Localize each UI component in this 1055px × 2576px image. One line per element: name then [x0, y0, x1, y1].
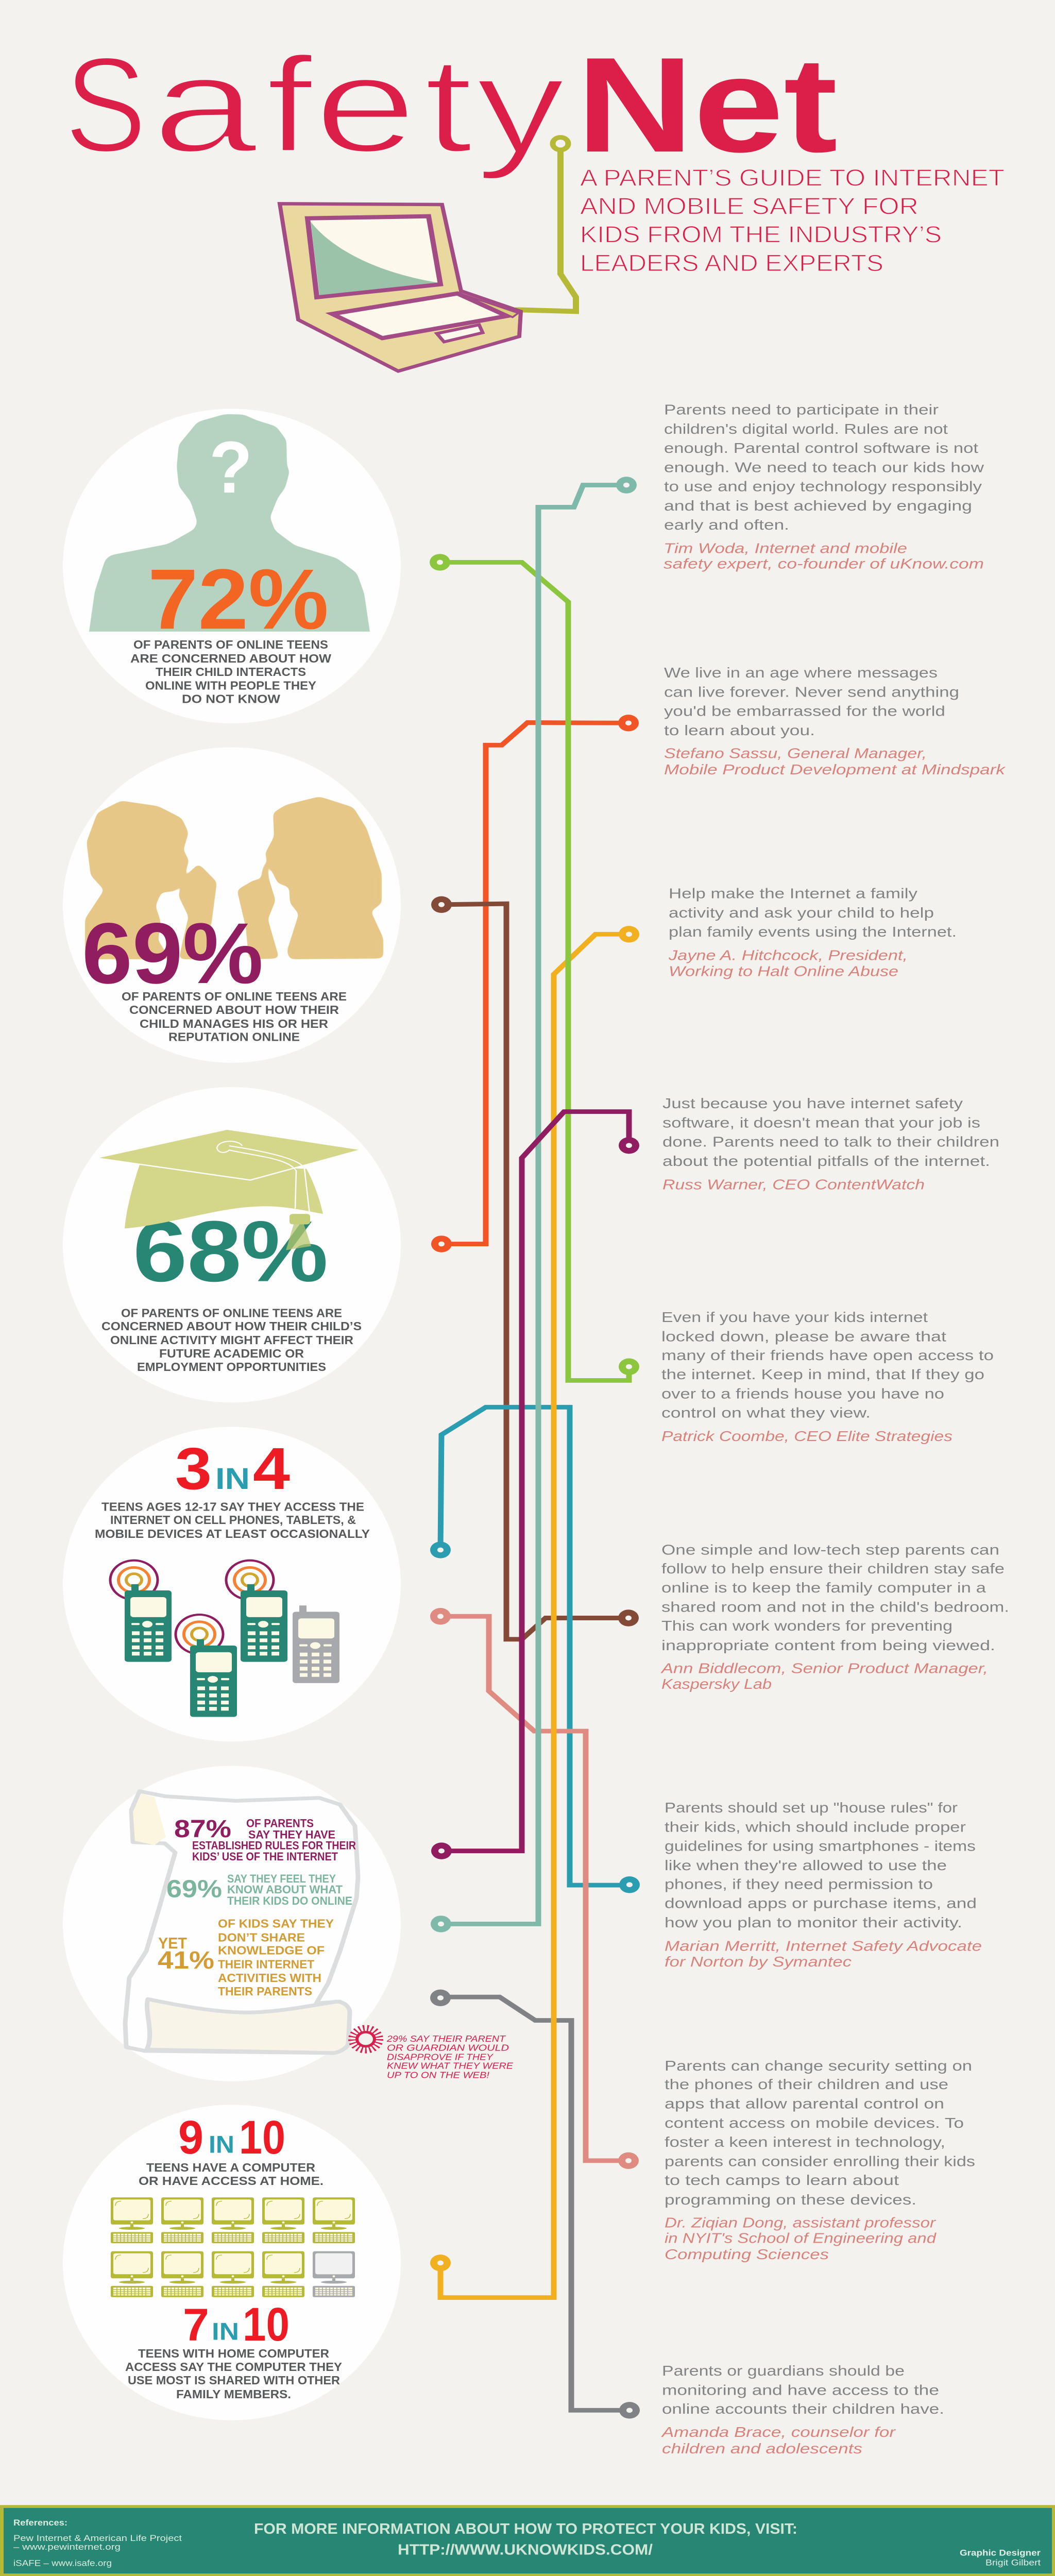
- quote: Patrick Coombe: Patrick Coombe, CEO Elite Strategies: [661, 1428, 952, 1444]
- quote: Marian Merritt: [665, 1800, 982, 1970]
- icon: two silhouettes whispering: [85, 796, 383, 959]
- subtitle: KIDS FROM THE INDUSTRY’S: [580, 222, 942, 248]
- panel: scroll statistics: [63, 1766, 401, 2081]
- quote: Stefano Sassu: can live forever. Never send anything: [664, 684, 959, 700]
- references: Pew Internet & American Life Project: [13, 2534, 182, 2543]
- stat: 87 percent: [174, 1815, 356, 1863]
- quote: Tim Woda: and that is best achieved by engaging: [664, 498, 972, 514]
- stat: 87 percent: ESTABLISHED RULES FOR THEIR: [192, 1840, 356, 1852]
- quote: Tim Woda: early and often.: [664, 517, 789, 533]
- quote: Stefano Sassu: you'd be embarrassed for the world: [664, 703, 945, 719]
- caption: ONLINE ACTIVITY MIGHT AFFECT THEIR: [110, 1334, 353, 1347]
- icon: laptop: [280, 204, 521, 371]
- line: yellow: [430, 926, 639, 2298]
- references: References:: [13, 2518, 67, 2528]
- title: a: [152, 29, 259, 180]
- caption: shared computers: USE MOST IS SHARED WITH OTHER: [128, 2375, 340, 2387]
- figure: 3 in 4: IN: [215, 1462, 250, 1496]
- stat: 87 percent: KIDS’ USE OF THE INTERNET: [192, 1851, 338, 1863]
- stat: yet 41 percent: THEIR PARENTS: [218, 1985, 312, 1998]
- caption: OF PARENTS OF ONLINE TEENS ARE: [121, 1307, 342, 1320]
- caption: CHILD MANAGES HIS OR HER: [140, 1018, 328, 1030]
- figure: 7 in 10: 10: [243, 2298, 290, 2351]
- callout: 29 percent: OR GUARDIAN WOULD: [387, 2043, 509, 2053]
- quote: Tim Woda: Parents need to participate in their: [664, 402, 939, 418]
- caption: computer access: OR HAVE ACCESS AT HOME.: [139, 2175, 324, 2188]
- quote: Amanda Brace: Parents or guardians should be: [662, 2363, 905, 2379]
- quote: Ann Biddlecom: follow to help ensure their children stay safe: [661, 1561, 1005, 1577]
- laptop keyboard: [332, 294, 507, 338]
- quote: Russ Warner: software, it doesn't mean that your job is: [662, 1115, 980, 1131]
- stat: yet 41 percent: DON’T SHARE: [218, 1930, 305, 1944]
- line: blue: [430, 1407, 640, 1893]
- panel: stat 68 percent: [63, 1087, 401, 1402]
- callout: 29 percent: 29% SAY THEIR PARENT: [386, 2034, 506, 2044]
- quote: Tim Woda: safety expert, co-founder of uKnow.com: [663, 556, 984, 572]
- icon: computers grid: [111, 2197, 355, 2297]
- quote: Jayne A. Hitchcock: Help make the Internet a family: [669, 886, 918, 902]
- line: brown: [431, 896, 639, 1639]
- figure: 7 in 10: [183, 2298, 290, 2351]
- caption: CONCERNED ABOUT HOW THEIR CHILD’S: [101, 1320, 362, 1333]
- caption: OF PARENTS OF ONLINE TEENS ARE: [122, 991, 347, 1003]
- quote: Russ Warner: about the potential pitfalls of the internet.: [662, 1153, 990, 1169]
- caption: INTERNET ON CELL PHONES, TABLETS, &: [110, 1514, 356, 1527]
- stat: 87 percent: OF PARENTS: [246, 1818, 314, 1830]
- figure: 9 in 10: 10: [239, 2111, 285, 2164]
- icon: paper scroll: [125, 1791, 358, 2053]
- quote: Stefano Sassu: We live in an age where messages: [664, 665, 938, 681]
- title: S: [64, 29, 147, 180]
- title: e: [314, 29, 417, 180]
- title: t: [424, 29, 473, 180]
- caption: shared computers: [125, 2348, 342, 2401]
- caption: REPUTATION ONLINE: [168, 1031, 300, 1044]
- figure: 68%: 68%: [133, 1202, 328, 1299]
- subtitle: LEADERS AND EXPERTS: [580, 250, 883, 276]
- figure: 9 in 10: IN: [209, 2131, 234, 2158]
- panel: stat 69 percent: [63, 747, 401, 1063]
- icon: graduation cap: [96, 1129, 362, 1250]
- caption: EMPLOYMENT OPPORTUNITIES: [137, 1361, 326, 1374]
- call to action: FOR MORE INFORMATION ABOUT HOW TO PROTECT YOUR KIDS, VISIT:: [254, 2520, 797, 2537]
- figure: 3 in 4: 4: [253, 1436, 290, 1502]
- figure: 7 in 10: 7: [183, 2299, 209, 2351]
- stat: yet 41 percent: KNOWLEDGE OF: [218, 1943, 325, 1957]
- quote: Marian Merritt: their kids, which should include proper: [665, 1819, 966, 1835]
- quote: Patrick Coombe: [661, 1309, 994, 1444]
- stat: yet 41 percent: OF KIDS SAY THEY: [218, 1917, 334, 1930]
- stat: 69 percent: SAY THEY FEEL THEY: [227, 1873, 336, 1886]
- caption: computer access: [139, 2161, 324, 2188]
- footer: [0, 2505, 1055, 2576]
- quote: Patrick Coombe: many of their friends have open access to: [661, 1347, 994, 1363]
- references: – www.pewinternet.org: [13, 2543, 121, 2552]
- quote: Amanda Brace: monitoring and have access to the: [662, 2382, 939, 2398]
- title: [64, 29, 838, 181]
- icon: sunburst: [352, 2028, 379, 2050]
- designer credit: Graphic Designer: [960, 2548, 1041, 2558]
- quote: Jayne A. Hitchcock: activity and ask your child to help: [669, 905, 934, 921]
- caption: [101, 1307, 362, 1374]
- caption: shared computers: ACCESS SAY THE COMPUTER THEY: [125, 2361, 342, 2374]
- quote: Amanda Brace: online accounts their children have.: [662, 2401, 944, 2417]
- figure: 69%: 69%: [82, 905, 263, 1002]
- subtitle: [580, 165, 1005, 276]
- quote: Tim Woda: [663, 402, 984, 572]
- callout: 29 percent: UP TO ON THE WEB!: [387, 2070, 489, 2080]
- references: iSAFE – www.isafe.org: [13, 2558, 112, 2568]
- references: [13, 2518, 182, 2568]
- stat: 69 percent: THEIR KIDS DO ONLINE: [227, 1895, 352, 1907]
- callout: 29 percent: [386, 2034, 514, 2080]
- quote: Stefano Sassu: [664, 665, 1006, 777]
- quote: Dr. Ziqian Dong: content access on mobile devices. To: [665, 2115, 964, 2131]
- callout: 29 percent: DISAPPROVE IF THEY: [387, 2052, 494, 2062]
- designer credit: [960, 2548, 1041, 2568]
- title: y: [476, 29, 565, 181]
- quote: Patrick Coombe: control on what they view.: [661, 1405, 871, 1421]
- quote: Marian Merritt: Marian Merritt, Internet Safety Advocate: [665, 1938, 982, 1954]
- icon: silhouette with question mark: ?: [209, 426, 252, 508]
- quote: Stefano Sassu: Mobile Product Development at Mindspark: [664, 761, 1006, 777]
- figure: 9 in 10: [178, 2111, 285, 2164]
- caption: shared computers: FAMILY MEMBERS.: [176, 2388, 291, 2401]
- quote: Patrick Coombe: the internet. Keep in mind, that If they go: [661, 1366, 984, 1382]
- quote: Ann Biddlecom: online is to keep the family computer in a: [661, 1580, 986, 1596]
- quote: Ann Biddlecom: [660, 1541, 1009, 1692]
- quote: Russ Warner: Russ Warner, CEO ContentWatch: [662, 1176, 925, 1193]
- quote: Patrick Coombe: over to a friends house you have no: [661, 1385, 944, 1402]
- stat: 87 percent: 87%: [174, 1815, 231, 1843]
- caption: ONLINE WITH PEOPLE THEY: [145, 680, 316, 692]
- quote: Marian Merritt: phones, if they need permission to: [665, 1876, 933, 1892]
- stat: 69 percent: 69%: [166, 1875, 222, 1903]
- caption: OF PARENTS OF ONLINE TEENS: [133, 639, 328, 651]
- quote: Jayne A. Hitchcock: Jayne A. Hitchcock, President,: [668, 947, 908, 963]
- laptop screen: [308, 216, 440, 297]
- figure: 3 in 4: 3: [175, 1436, 212, 1502]
- caption: ARE CONCERNED ABOUT HOW: [130, 652, 332, 665]
- quote: Patrick Coombe: locked down, please be aware that: [661, 1328, 946, 1345]
- call to action: [254, 2520, 797, 2558]
- line: pink: [430, 1608, 639, 2169]
- panel: 3 in 4 teens: [63, 1427, 401, 1741]
- caption: [95, 1501, 370, 1540]
- caption: MOBILE DEVICES AT LEAST OCCASIONALLY: [95, 1528, 370, 1540]
- line: green: [430, 554, 639, 1380]
- quote: Jayne A. Hitchcock: plan family events using the Internet.: [669, 924, 957, 940]
- stat: 87 percent: SAY THEY HAVE: [248, 1829, 335, 1841]
- quote: Dr. Ziqian Dong: in NYIT's School of Engineering and: [665, 2230, 937, 2246]
- quote: Dr. Ziqian Dong: [665, 2058, 975, 2262]
- panel: stat 72 percent: [63, 409, 401, 723]
- quote: Marian Merritt: how you plan to monitor their activity.: [665, 1914, 962, 1930]
- quote: Marian Merritt: like when they're allowed to use the: [665, 1857, 947, 1873]
- caption: THEIR CHILD INTERACTS: [156, 666, 306, 679]
- stat: 69 percent: KNOW ABOUT WHAT: [227, 1884, 343, 1896]
- title: Net: [576, 29, 838, 180]
- quote: Dr. Ziqian Dong: Parents can change security setting on: [665, 2058, 972, 2074]
- quote: Tim Woda: Tim Woda, Internet and mobile: [663, 540, 907, 556]
- quote: Dr. Ziqian Dong: Computing Sciences: [665, 2246, 829, 2262]
- laptop hinge: [457, 293, 518, 317]
- quote: Dr. Ziqian Dong: foster a keen interest in technology,: [665, 2134, 945, 2150]
- caption: [130, 639, 332, 706]
- subtitle: AND MOBILE SAFETY FOR: [580, 193, 918, 219]
- subtitle: A PARENT’S GUIDE TO INTERNET: [580, 165, 1005, 191]
- caption: CONCERNED ABOUT HOW THEIR: [129, 1004, 339, 1016]
- stat: yet 41 percent: 41%: [158, 1946, 214, 1974]
- caption: shared computers: TEENS WITH HOME COMPUTER: [138, 2348, 329, 2361]
- caption: FUTURE ACADEMIC OR: [159, 1347, 304, 1360]
- connector from title to laptop: [515, 138, 576, 311]
- quote: Amanda Brace: children and adolescents: [662, 2441, 862, 2456]
- quote: Marian Merritt: for Norton by Symantec: [665, 1954, 852, 1970]
- network lines connecting stats and quotes: [430, 477, 640, 2419]
- quote: Tim Woda: enough. We need to teach our kids how: [664, 459, 984, 476]
- quote: Patrick Coombe: Even if you have your kids internet: [661, 1309, 928, 1325]
- quote: Ann Biddlecom: Kaspersky Lab: [661, 1676, 772, 1692]
- quote: Russ Warner: Just because you have internet safety: [662, 1095, 963, 1111]
- quote: Jayne A. Hitchcock: [668, 886, 957, 979]
- quote: Tim Woda: enough. Parental control software is not: [664, 440, 978, 456]
- caption: [122, 991, 347, 1044]
- title: f: [266, 29, 313, 180]
- quote: Amanda Brace: Amanda Brace, counselor for: [661, 2424, 896, 2440]
- quote: Jayne A. Hitchcock: Working to Halt Online Abuse: [669, 963, 898, 979]
- panel: home computers: [63, 2105, 401, 2420]
- quote: Dr. Ziqian Dong: to tech camps to learn about: [665, 2172, 899, 2188]
- designer credit: Brigit Gilbert: [985, 2558, 1041, 2568]
- quote: Ann Biddlecom: This can work wonders for preventing: [661, 1618, 952, 1634]
- quote: Dr. Ziqian Dong: apps that allow parental control on: [665, 2096, 944, 2112]
- line: sage: [431, 477, 637, 1933]
- figure: 7 in 10: IN: [212, 2318, 239, 2345]
- stat: yet 41 percent: ACTIVITIES WITH: [218, 1971, 321, 1985]
- quote: Marian Merritt: download apps or purchase items, and: [665, 1895, 977, 1911]
- icon: silhouette with question mark: [89, 415, 370, 639]
- stat: yet 41 percent: [158, 1917, 334, 1998]
- quote: Stefano Sassu: to learn about you.: [664, 722, 815, 738]
- stat: 69 percent: [166, 1873, 352, 1907]
- callout: 29 percent: KNEW WHAT THEY WERE: [387, 2061, 514, 2071]
- call to action: HTTP://WWW.UKNOWKIDS.COM/: [398, 2541, 653, 2558]
- quote: Dr. Ziqian Dong: programming on these devices.: [665, 2192, 916, 2208]
- icon: mobile phones: [110, 1561, 339, 1717]
- quote: Russ Warner: [662, 1095, 999, 1193]
- quote: Ann Biddlecom: inappropriate content from being viewed.: [661, 1637, 995, 1653]
- quote: Ann Biddlecom: shared room and not in the child's bedroom.: [661, 1599, 1009, 1615]
- line: purple: [431, 1112, 639, 1859]
- laptop trackpad: [437, 325, 483, 342]
- laptop body: [280, 204, 521, 371]
- figure: 3 in 4: [175, 1436, 290, 1502]
- quote: Dr. Ziqian Dong: Dr. Ziqian Dong, assistant professor: [665, 2215, 937, 2231]
- line: gray: [430, 1990, 640, 2419]
- caption: TEENS AGES 12-17 SAY THEY ACCESS THE: [101, 1501, 364, 1514]
- quote: Dr. Ziqian Dong: the phones of their children and use: [665, 2076, 948, 2092]
- quote: Stefano Sassu: Stefano Sassu, General Manager,: [664, 745, 927, 761]
- stat: yet 41 percent: THEIR INTERNET: [218, 1957, 314, 1971]
- line: orange: [431, 715, 639, 1252]
- caption: DO NOT KNOW: [182, 693, 281, 706]
- caption: computer access: TEENS HAVE A COMPUTER: [146, 2161, 315, 2174]
- quote: Russ Warner: done. Parents need to talk to their children: [662, 1134, 999, 1150]
- quote: Dr. Ziqian Dong: parents can consider enrolling their kids: [665, 2153, 975, 2170]
- quote: Amanda Brace: [661, 2363, 944, 2456]
- quote: Tim Woda: children's digital world. Rules are not: [664, 421, 948, 437]
- quote: Ann Biddlecom: One simple and low-tech step parents can: [661, 1541, 999, 1558]
- figure: 9 in 10: 9: [178, 2111, 203, 2164]
- quote: Marian Merritt: Parents should set up "house rules" for: [665, 1800, 958, 1816]
- figure: 72%: 72%: [148, 551, 329, 647]
- stat: yet 41 percent: YET: [158, 1935, 187, 1952]
- quote: Ann Biddlecom: Ann Biddlecom, Senior Product Manager,: [660, 1660, 988, 1676]
- quote: Marian Merritt: guidelines for using smartphones - items: [665, 1838, 976, 1854]
- quote: Tim Woda: to use and enjoy technology responsibly: [664, 479, 982, 495]
